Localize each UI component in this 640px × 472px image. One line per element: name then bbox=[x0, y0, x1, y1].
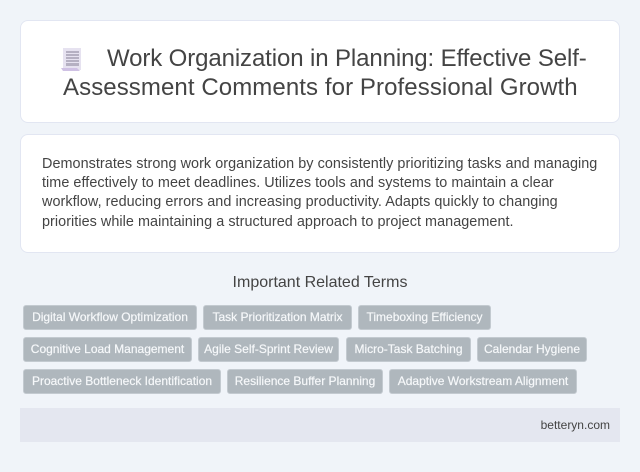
footer bbox=[20, 408, 620, 442]
tag bbox=[198, 337, 339, 362]
tag bbox=[23, 337, 192, 362]
tag bbox=[346, 337, 471, 362]
tag bbox=[358, 305, 491, 330]
tag: Proactive Bottleneck Identification bbox=[32, 374, 212, 388]
tag bbox=[23, 305, 197, 330]
tag: Timeboxing Efficiency bbox=[366, 310, 483, 324]
tag: Cognitive Load Management bbox=[31, 342, 184, 356]
description text: priorities while maintaining a structured approach to project management. bbox=[42, 214, 514, 230]
tag bbox=[227, 369, 383, 394]
tag: Task Prioritization Matrix bbox=[212, 310, 343, 324]
footer link text: betteryn.com bbox=[541, 418, 610, 432]
description text: workflow, reducing errors and increasing productivity. Adapts quickly to changing bbox=[42, 194, 558, 210]
tag: Calendar Hygiene bbox=[484, 342, 580, 356]
icon: document bbox=[61, 48, 81, 71]
tag bbox=[477, 337, 587, 362]
title line 2: Assessment Comments for Professional Growth bbox=[63, 74, 578, 101]
tag: Digital Workflow Optimization bbox=[32, 310, 188, 324]
description text: Demonstrates strong work organization by consistently prioritizing tasks and managing bbox=[42, 156, 597, 172]
tag: Micro-Task Batching bbox=[354, 342, 463, 356]
tag bbox=[23, 369, 221, 394]
heading: related terms: Important Related Terms bbox=[233, 274, 407, 291]
panel: title card bbox=[20, 20, 620, 123]
tag: Resilience Buffer Planning bbox=[235, 374, 375, 388]
tag bbox=[389, 369, 577, 394]
description text: time effectively to meet deadlines. Utilizes tools and systems to maintain a clear bbox=[42, 175, 554, 191]
title line 1: Work Organization in Planning: Effective Self- bbox=[107, 45, 587, 72]
tag bbox=[203, 305, 352, 330]
tag: Adaptive Workstream Alignment bbox=[398, 374, 568, 388]
tag: Agile Self-Sprint Review bbox=[204, 342, 333, 356]
panel: description card bbox=[20, 134, 620, 253]
description text bbox=[42, 156, 597, 230]
